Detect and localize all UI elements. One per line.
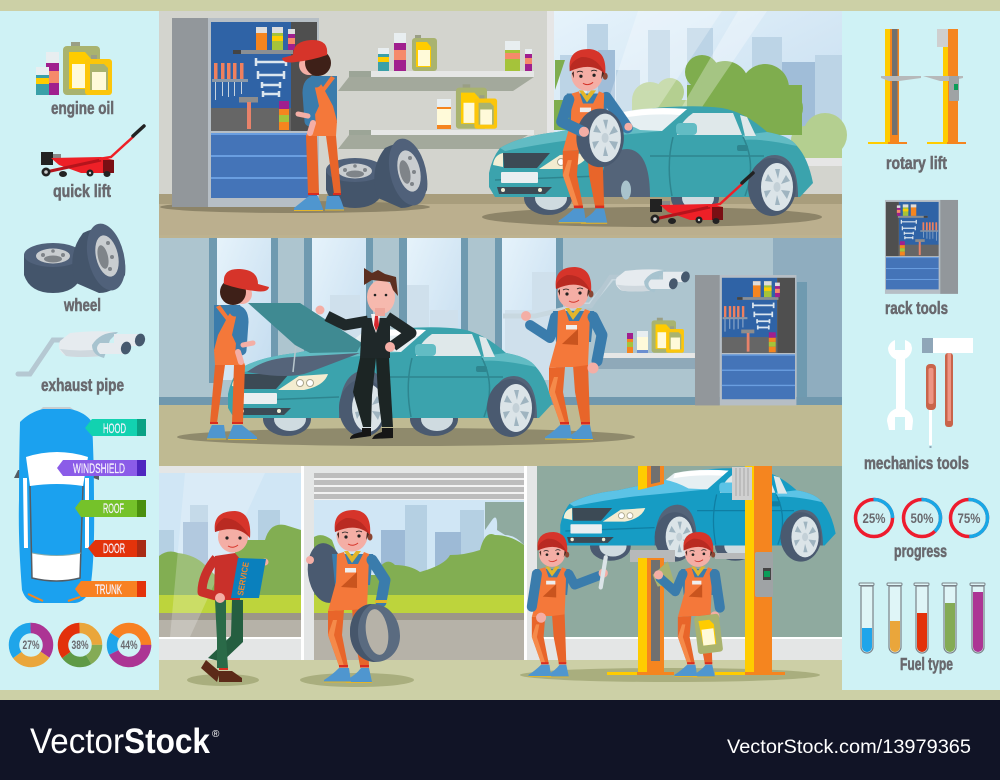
progress ring 75% (950, 500, 988, 536)
test tube red (914, 583, 929, 653)
label: rotary lift: rotary lift (886, 153, 947, 173)
tool cabinet row 1 (172, 18, 319, 207)
label: quick lift: quick lift (53, 181, 111, 201)
footer bar (0, 700, 1000, 780)
label: mechanics tools: mechanics tools (864, 453, 969, 473)
label: wheel: wheel (63, 295, 101, 315)
tag: trunk (75, 581, 146, 597)
tag: roof: ROOF (103, 500, 124, 516)
panel: workshop scene row 1 (159, 11, 847, 238)
tag: hood (85, 419, 146, 436)
floor shadows row 3 (187, 668, 820, 687)
footer logo: Vector (30, 722, 124, 761)
exhaust pipe hanging on wall (503, 269, 691, 316)
icon: wheel (24, 220, 131, 294)
panel: right tools panel (842, 11, 1000, 690)
donut chart 27% (14, 628, 48, 662)
car top view diagram (14, 407, 99, 603)
progress ring 25% (856, 500, 892, 536)
mechanic smiling row 2 (521, 267, 602, 440)
footer image id: VectorStock.com/13979365 (727, 737, 971, 758)
icon: hammer (922, 338, 973, 427)
donut chart 44%: 44% (120, 640, 138, 652)
teal car with open hood (228, 303, 552, 437)
test tube blue (859, 583, 874, 653)
spare tires row 1 (326, 135, 433, 209)
donut chart 44% (112, 628, 146, 662)
two post lift in scene (607, 466, 785, 675)
tag: trunk: TRUNK (95, 581, 122, 597)
teal car without front wheel (489, 106, 813, 216)
progress ring 25%: 25% (862, 510, 886, 526)
footer logo: ® (212, 729, 220, 740)
mechanic at cabinet (282, 40, 344, 210)
donut chart 38%: 38% (72, 640, 88, 652)
oil jugs and bottle on lower shelf (437, 84, 497, 129)
mechanic with wrench (528, 532, 608, 677)
panel: workshop scene row 2 (159, 235, 842, 466)
mechanic looking under hood (207, 269, 269, 440)
progress ring 50%: 50% (910, 510, 934, 526)
shadow under teal car (482, 207, 822, 227)
tag: door: DOOR (103, 540, 125, 556)
panel: left parts panel (0, 11, 159, 690)
icon: engine oil (36, 42, 112, 95)
label: fuel type: Fuel type (900, 654, 953, 674)
label: rack tools: rack tools (885, 298, 948, 318)
footer logo: Stock (124, 722, 210, 761)
progress ring 75%: 75% (958, 510, 981, 526)
mechanic carrying tires (324, 510, 387, 682)
tag: hood: HOOD (103, 420, 126, 436)
businessman in suit (316, 268, 411, 439)
wall shelf row 2 (595, 353, 711, 369)
tag: roof (75, 500, 146, 517)
man reading service book: SERVICE (235, 561, 251, 596)
donut chart 38% (63, 628, 97, 662)
bottles on upper shelf (378, 33, 532, 71)
icon: exhaust pipe (18, 331, 147, 374)
label: engine oil: engine oil (51, 98, 114, 118)
donut chart 27%: 27% (22, 640, 40, 652)
tire held in hand (350, 604, 400, 662)
tool cabinet row 2 (695, 275, 796, 405)
shadow under cabinet and tires (160, 201, 430, 213)
bottles and jugs row 2 (627, 318, 684, 353)
icon: quick lift (41, 126, 144, 177)
shelves row 1 (338, 71, 534, 149)
oil jug in mechanic hand (694, 614, 723, 654)
tire on mechanic shoulder (304, 541, 348, 605)
floor jack row 1 (650, 173, 753, 224)
footer logo (30, 722, 220, 761)
blue car on lift (560, 468, 836, 562)
panel: workshop scene row 3 (159, 466, 842, 690)
tag: door (88, 540, 146, 557)
test tube purple (970, 583, 985, 653)
test tube green (942, 583, 957, 653)
shadow under row 2 group (177, 428, 635, 446)
progress ring 50% (904, 500, 940, 536)
label: exhaust pipe: exhaust pipe (41, 375, 124, 395)
mechanic carrying wheel (559, 49, 632, 223)
test tube orange (887, 583, 902, 653)
icon: rack tools (885, 200, 958, 294)
man reading service book (201, 511, 268, 682)
icon: screwdriver (926, 364, 936, 448)
icon: wrench (887, 340, 913, 430)
label: progress: progress (894, 541, 947, 561)
tag: windshield: WINDSHIELD (73, 460, 125, 476)
mechanic with funnel and oil (653, 532, 720, 677)
icon: rotary lift (868, 29, 966, 144)
